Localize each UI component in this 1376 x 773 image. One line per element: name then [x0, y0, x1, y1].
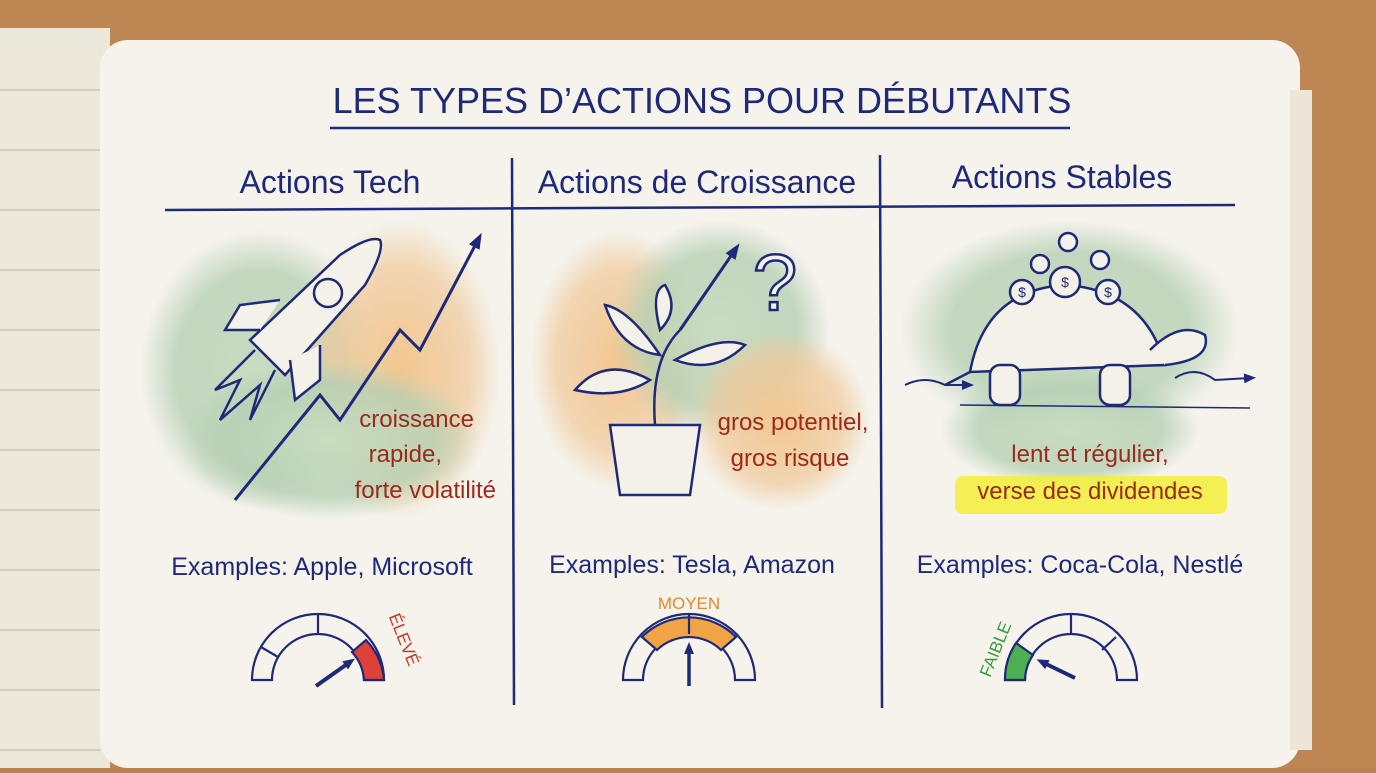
icon: plant in pot — [575, 285, 745, 495]
panel: stables illustration: $ — [1104, 284, 1112, 300]
text: tech description: rapide, — [369, 441, 442, 468]
gauge: faible — [976, 614, 1137, 680]
panel: stables illustration: $ — [1018, 284, 1026, 300]
panel: croissance illustration — [530, 220, 870, 510]
grid lines — [165, 205, 1235, 210]
heading: stables: Actions Stables — [952, 159, 1172, 195]
text: tech description — [355, 406, 496, 504]
gauge: faible: FAIBLE — [976, 619, 1015, 679]
text: tech description: croissance — [359, 406, 474, 433]
text: stables description: lent et régulier, — [1011, 441, 1169, 468]
text: croissance description — [718, 409, 868, 472]
icon: rocket — [215, 239, 381, 420]
gauge: élevé — [252, 611, 423, 686]
icon: question mark: ? — [753, 238, 797, 327]
icon: turtle with coins — [945, 233, 1206, 405]
text: stables description: verse des dividendes — [977, 478, 1203, 505]
text: tech description: forte volatilité — [355, 477, 496, 504]
arrow: left wave — [905, 380, 968, 385]
text: croissance description: gros risque — [731, 445, 849, 472]
highlight — [955, 476, 1227, 514]
notebook left page — [0, 28, 110, 768]
text: examples stables: Examples: Coca-Cola, Nestlé — [917, 551, 1243, 579]
arrow: rising zigzag — [235, 240, 478, 500]
title: LES TYPES D’ACTIONS POUR DÉBUTANTS — [333, 80, 1071, 121]
gauge: moyen: MOYEN — [658, 594, 720, 613]
text: examples tech: Examples: Apple, Microsoft — [171, 553, 473, 581]
panel: tech illustration — [140, 220, 500, 520]
text: stables description — [977, 441, 1203, 505]
arrow: right wave — [1175, 372, 1250, 380]
gauge: élevé: ÉLEVÉ — [385, 611, 423, 669]
text: examples croissance: Examples: Tesla, Amazon — [549, 551, 835, 579]
panel: stables illustration — [900, 220, 1250, 514]
heading: tech: Actions Tech — [240, 164, 420, 200]
gauge: moyen — [623, 594, 755, 686]
text: croissance description: gros potentiel, — [718, 409, 868, 436]
panel: stables illustration: $ — [1061, 274, 1069, 290]
arrow: growth — [680, 250, 735, 330]
heading: croissance: Actions de Croissance — [538, 164, 856, 200]
